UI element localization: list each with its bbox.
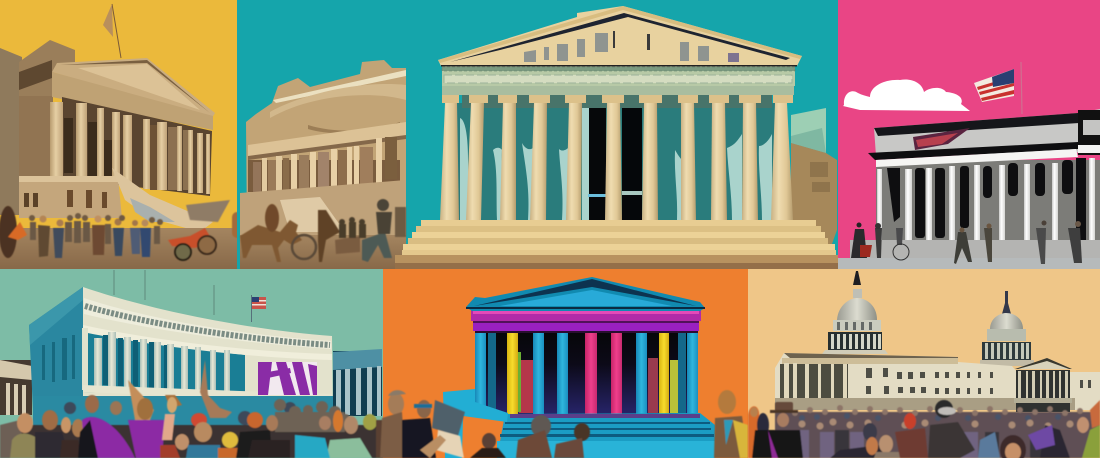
building: colourful temple bbox=[443, 277, 715, 458]
left dome bbox=[822, 271, 888, 354]
building: small pale annex bbox=[791, 108, 837, 255]
panel: mint background with long white building and crowd bbox=[0, 269, 383, 458]
icon: american flag bbox=[251, 295, 266, 322]
panel: peach background with domed capitol and crowd bbox=[748, 269, 1100, 458]
columns bbox=[475, 332, 698, 414]
panel: pink background with flag, cloud and white colonnade bbox=[838, 0, 1100, 270]
right portico bbox=[1014, 358, 1072, 412]
building: central classical temple bbox=[395, 6, 838, 270]
icon: pennant flag on pole bbox=[103, 4, 121, 58]
right dome bbox=[980, 291, 1034, 366]
panel: yellow background with classical building and procession bbox=[0, 0, 250, 270]
colonnade bbox=[82, 328, 230, 393]
horses and figures bbox=[240, 199, 406, 262]
grand staircase bbox=[112, 168, 213, 232]
pediment bbox=[466, 277, 705, 311]
building: right colonnaded hall bbox=[333, 349, 382, 416]
building: long curved capitol hall bbox=[29, 287, 333, 430]
crowd bbox=[748, 400, 1100, 458]
base and stairs bbox=[497, 413, 715, 458]
pediment bbox=[438, 6, 802, 66]
panel: orange background with colourful temple bbox=[380, 269, 748, 458]
figures with newspaper bbox=[380, 390, 748, 458]
colonnade bbox=[877, 158, 1095, 241]
colonnade bbox=[50, 102, 210, 194]
capitals bbox=[442, 95, 793, 103]
building: white colonnaded hall bbox=[838, 109, 1100, 270]
steps bbox=[402, 220, 836, 255]
steps bbox=[850, 240, 1100, 258]
main wings bbox=[775, 353, 1100, 410]
crowd and carriage procession bbox=[0, 200, 250, 260]
building: capitol with two domes bbox=[775, 271, 1100, 412]
crowd bbox=[0, 360, 383, 458]
interior wall bbox=[457, 103, 777, 220]
building: side block bbox=[0, 48, 22, 215]
icon: american flag on pole bbox=[974, 62, 1022, 114]
colonnade bbox=[248, 137, 400, 192]
columns bbox=[440, 103, 793, 220]
ground bbox=[0, 228, 237, 270]
building: small left hall bbox=[0, 360, 32, 415]
entablature frieze bbox=[442, 66, 795, 95]
flagpoles bbox=[114, 270, 214, 315]
figures with bicycles bbox=[851, 220, 1082, 264]
entablature bbox=[471, 310, 701, 333]
building: classical temple with portico bbox=[19, 40, 215, 232]
panel: teal background with two buildings bbox=[237, 0, 838, 270]
building: weathered rotunda bbox=[240, 60, 406, 270]
purple striped banner bbox=[258, 362, 317, 395]
stair side block bbox=[443, 389, 508, 458]
icon: white cloud bbox=[843, 80, 970, 111]
